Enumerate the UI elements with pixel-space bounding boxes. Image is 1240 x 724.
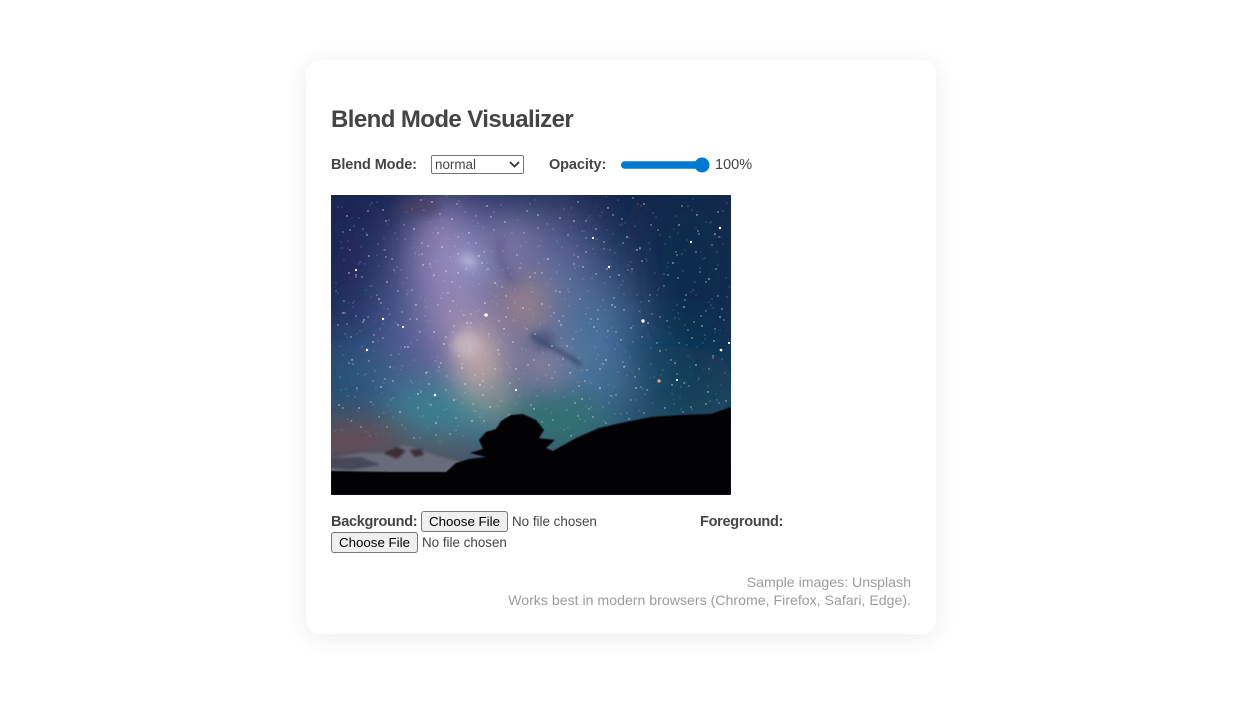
label: foreground: Foreground: xyxy=(700,514,783,530)
dropdown: blend mode select xyxy=(431,155,524,174)
image: milky way night sky with tree silhouette xyxy=(331,195,731,495)
text: foreground no file chosen: No file chosen xyxy=(422,535,507,550)
label: background: Background: xyxy=(331,514,417,530)
sky background xyxy=(331,195,731,495)
opacity value: 100% xyxy=(715,157,752,173)
dropdown: blend mode select: normal xyxy=(435,157,476,172)
dark dust lanes xyxy=(399,197,654,367)
distant snowy mountains xyxy=(331,445,462,472)
slider: opacity xyxy=(621,158,710,172)
button: foreground choose file: Choose File xyxy=(339,535,410,550)
button: foreground choose file xyxy=(331,532,418,553)
title: Blend Mode Visualizer xyxy=(331,106,573,133)
footer note xyxy=(508,574,911,608)
label: opacity: Opacity: xyxy=(549,157,606,173)
label: blend mode: Blend Mode: xyxy=(331,157,417,173)
footer note: Works best in modern browsers (Chrome, Firefox, Safari, Edge). xyxy=(508,592,911,608)
button: background choose file xyxy=(421,511,508,532)
button: background choose file: Choose File xyxy=(429,514,500,529)
hill and tree silhouette xyxy=(331,407,731,495)
sky glow clouds xyxy=(331,195,731,464)
milky way core xyxy=(413,202,569,422)
footer note: Sample images: Unsplash xyxy=(747,574,911,590)
panel: blend mode card xyxy=(306,60,936,634)
star field xyxy=(331,196,731,442)
bright stars xyxy=(355,227,730,396)
text: background no file chosen: No file chosen xyxy=(512,514,597,529)
